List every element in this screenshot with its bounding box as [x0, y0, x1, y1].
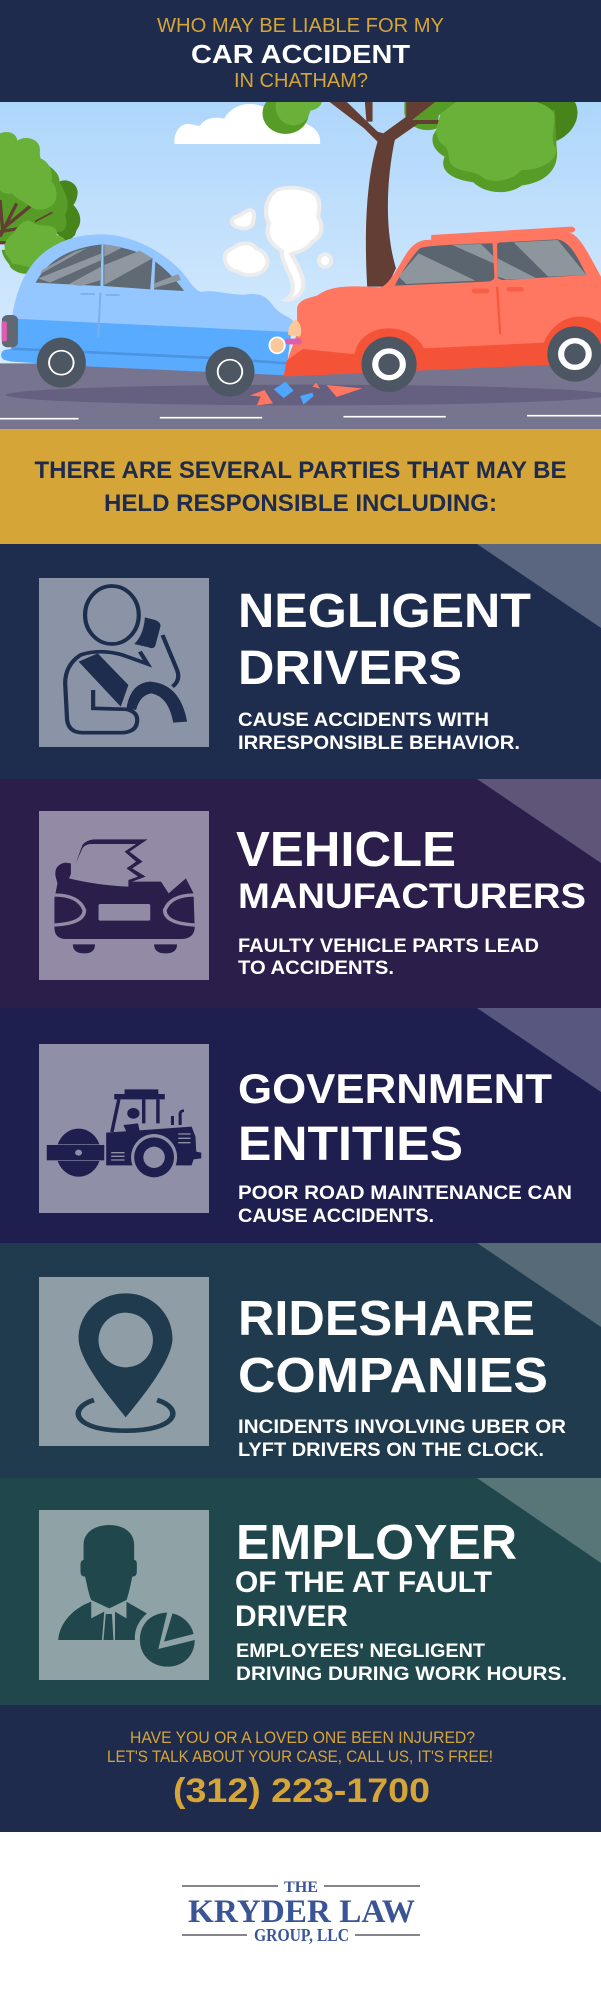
logo: KRYDER LAW	[188, 1894, 415, 1930]
panel: employer	[0, 1478, 601, 1705]
icon: hanging leaves	[263, 88, 322, 134]
heading: VEHICLE	[236, 823, 456, 877]
icon: red car	[284, 227, 601, 392]
intro band: HELD RESPONSIBLE INCLUDING:	[104, 490, 497, 517]
panel: government entities: ENTITIES	[238, 1118, 463, 1171]
icon: cloud	[174, 104, 320, 144]
icon: businessman with pie chart	[58, 1525, 195, 1667]
intro band: THERE ARE SEVERAL PARTIES THAT MAY BE	[34, 457, 566, 484]
icon: left tree	[0, 132, 80, 274]
heading: in chatham: IN CHATHAM?	[234, 70, 368, 92]
heading: RIDESHARE	[238, 1292, 535, 1346]
heading: car accident: CAR ACCIDENT	[191, 39, 410, 69]
description: POOR ROAD MAINTENANCE CAN	[238, 1182, 572, 1204]
panel: negligent drivers: IRRESPONSIBLE BEHAVIOR.	[238, 732, 520, 754]
panel: government entities: CAUSE ACCIDENTS.	[238, 1205, 434, 1227]
icon: blue car	[1, 234, 295, 397]
heading: EMPLOYER	[236, 1516, 517, 1570]
call to action	[0, 1705, 601, 1832]
icon: damaged car	[54, 839, 195, 953]
panel: vehicle manufacturers: MANUFACTURERS	[238, 877, 586, 916]
icon: right tree	[330, 102, 577, 287]
intro band	[0, 429, 601, 544]
logo: THE	[284, 1879, 318, 1896]
heading: GOVERNMENT	[238, 1065, 552, 1112]
logo	[0, 1832, 601, 1991]
panel: employer: DRIVER	[235, 1600, 348, 1633]
icon: driver on phone	[65, 586, 187, 733]
heading: NEGLIGENT	[238, 585, 531, 638]
panel: vehicle manufacturers	[0, 779, 601, 1008]
call to action: LET'S TALK ABOUT YOUR CASE, CALL US, IT'S FREE!	[107, 1747, 493, 1766]
panel: negligent drivers: DRIVERS	[238, 642, 462, 695]
description: FAULTY VEHICLE PARTS LEAD	[238, 935, 539, 957]
panel: rideshare companies	[0, 1243, 601, 1478]
description: CAUSE ACCIDENTS WITH	[238, 709, 489, 731]
icon: map pin	[78, 1293, 173, 1431]
panel: employer: DRIVING DURING WORK HOURS.	[236, 1663, 567, 1685]
illustration: car crash scene	[0, 88, 601, 429]
header banner	[0, 0, 601, 102]
description: EMPLOYEES' NEGLIGENT	[236, 1640, 485, 1662]
panel: rideshare companies: COMPANIES	[238, 1349, 548, 1403]
panel: negligent drivers	[0, 544, 601, 779]
description: INCIDENTS INVOLVING UBER OR	[238, 1416, 566, 1438]
road	[0, 363, 601, 429]
phone number: (312) 223-1700	[173, 1772, 430, 1810]
heading: who may be liable for my: WHO MAY BE LIABLE FOR MY	[157, 15, 444, 37]
panel: government entities	[0, 1008, 601, 1243]
panel: vehicle manufacturers: TO ACCIDENTS.	[238, 957, 394, 979]
logo: GROUP, LLC	[254, 1925, 349, 1945]
icon: road roller	[47, 1089, 201, 1181]
icon: crash debris	[250, 382, 362, 405]
icon: smoke	[225, 188, 331, 300]
panel: rideshare companies: LYFT DRIVERS ON THE CLOCK.	[238, 1439, 544, 1461]
call to action: HAVE YOU OR A LOVED ONE BEEN INJURED?	[130, 1728, 475, 1747]
panel: employer: OF THE AT FAULT	[235, 1566, 492, 1599]
